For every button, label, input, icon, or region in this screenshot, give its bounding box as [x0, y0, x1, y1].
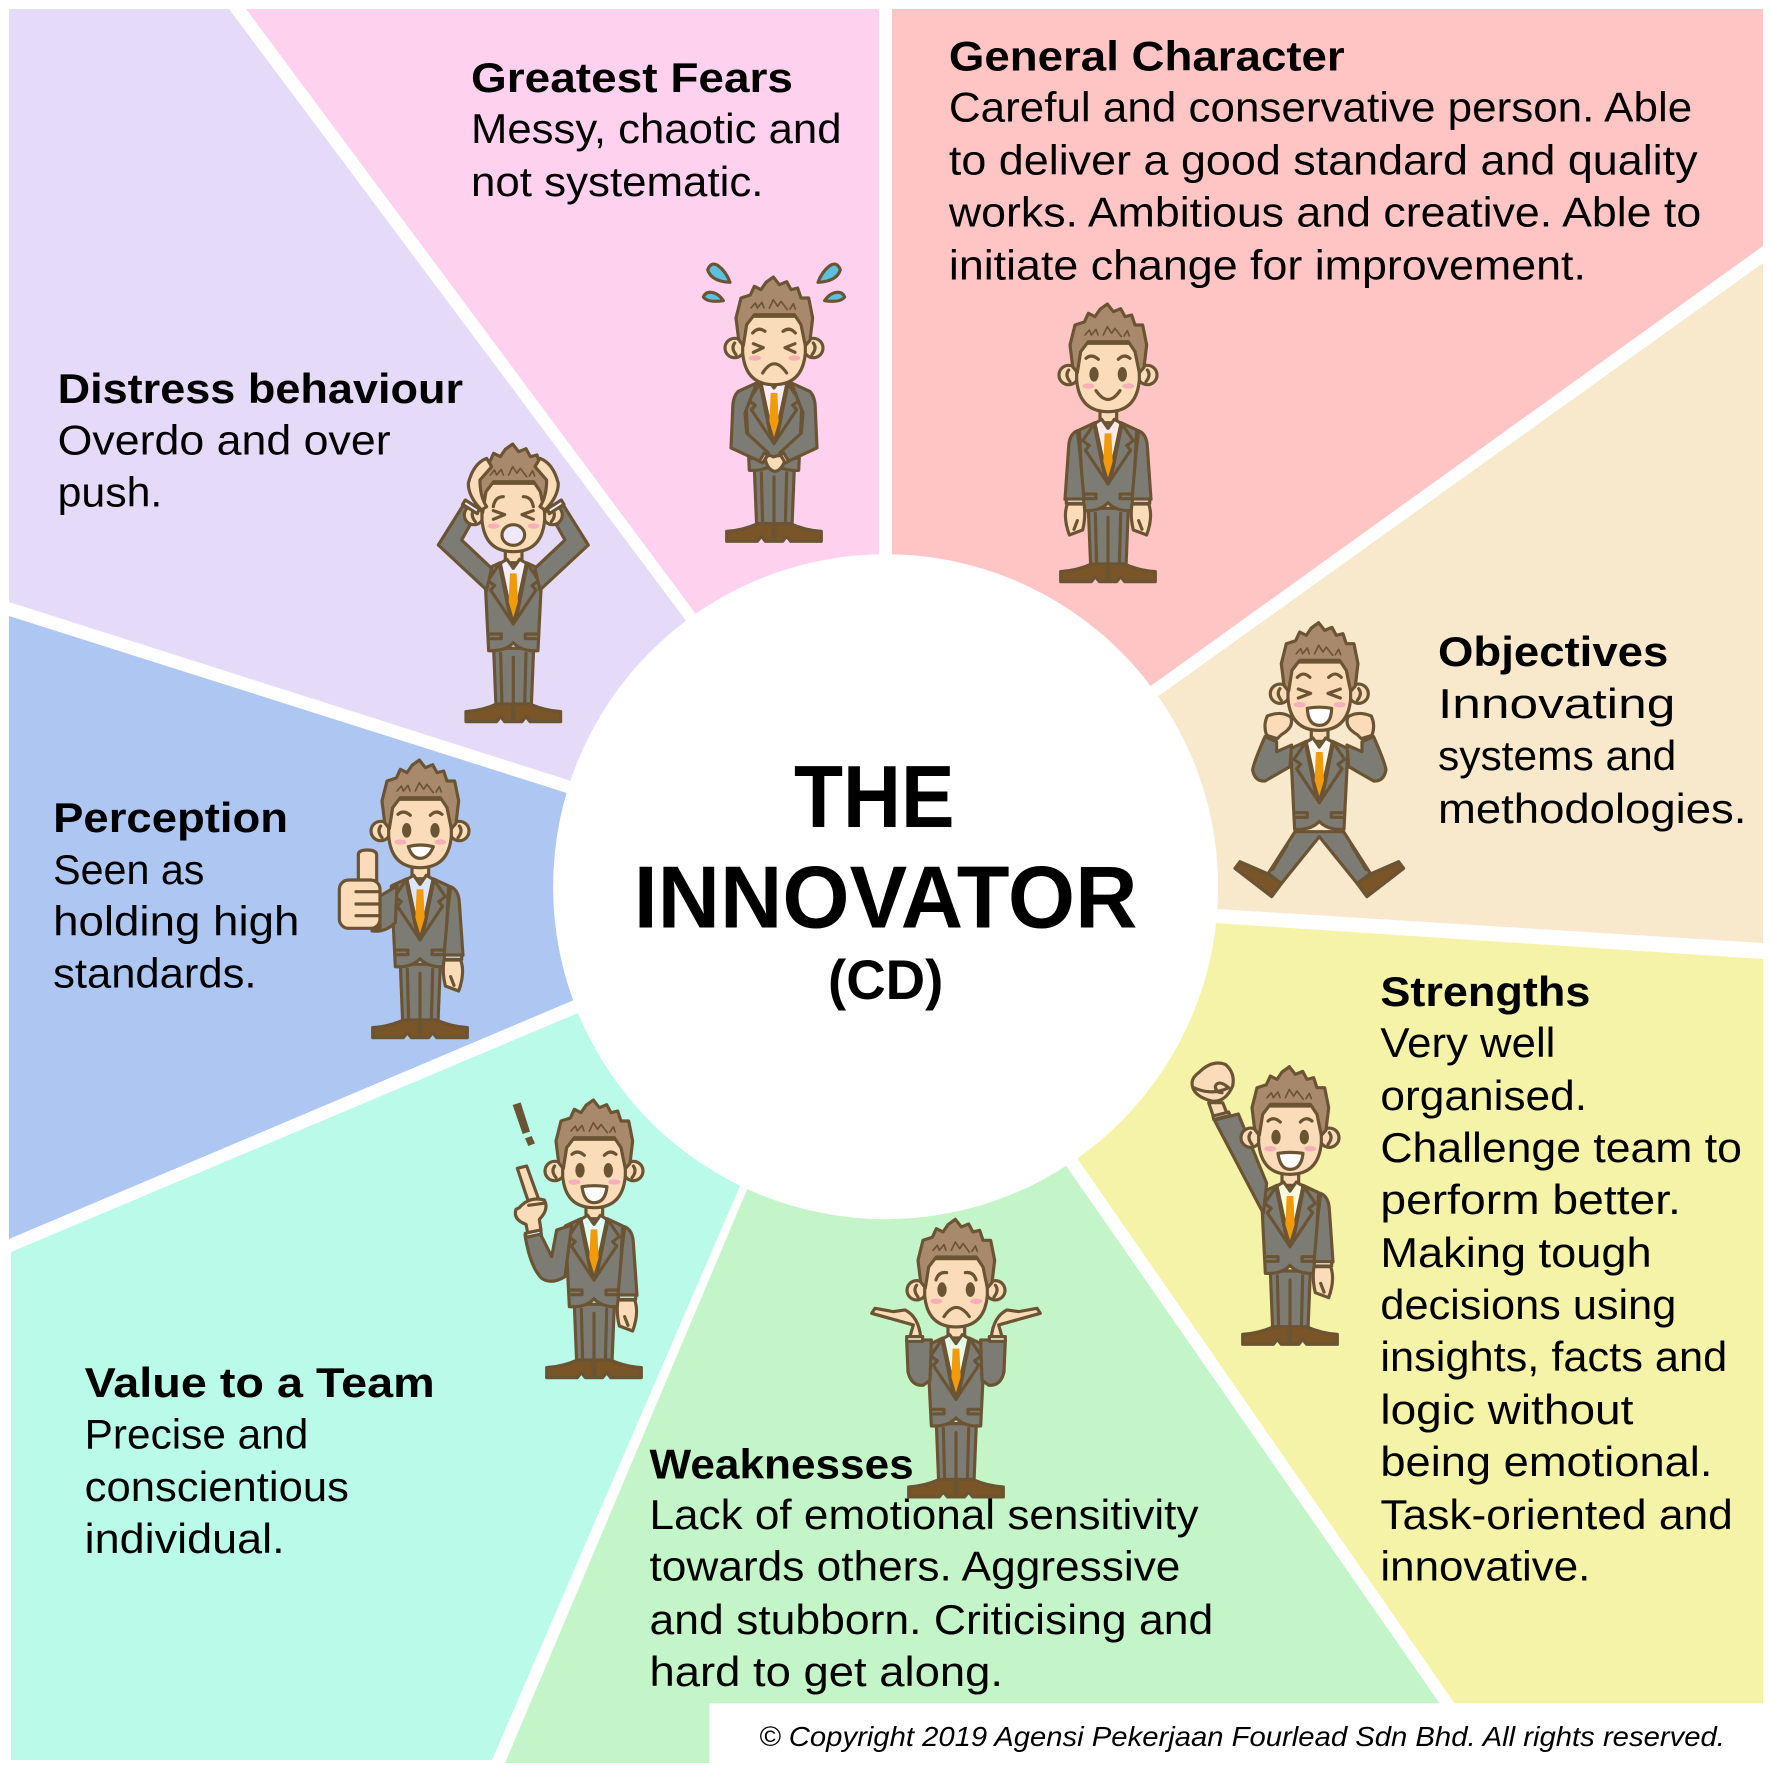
title: the innovator: [634, 747, 1138, 946]
text: weaknesses description: [650, 1491, 1213, 1695]
text: strengths description: being emotional.: [1380, 1438, 1712, 1485]
text: value to a team description: [85, 1411, 349, 1562]
text: weaknesses description: and stubborn. Criticising and: [650, 1596, 1213, 1643]
text: value to a team description: conscientious: [85, 1463, 349, 1510]
text: greatest fears description: [471, 105, 842, 205]
text: general character description: Careful and conservative person. Able: [949, 84, 1692, 130]
icon: businessman thumbs up: [339, 760, 469, 1038]
text: strengths description: Task-oriented and: [1380, 1491, 1733, 1538]
text: strengths description: decisions using: [1380, 1281, 1676, 1328]
heading: value to a team: Value to a Team: [85, 1359, 435, 1406]
text: strengths description: innovative.: [1380, 1543, 1590, 1590]
text: greatest fears description: Messy, chaotic and: [471, 105, 842, 152]
text: general character description: to deliver a good standard and quality: [949, 137, 1698, 184]
text: greatest fears description: not systematic.: [471, 158, 764, 205]
heading: perception: Perception: [53, 794, 288, 841]
heading: objectives: Objectives: [1438, 628, 1668, 675]
text: perception description: standards.: [53, 950, 256, 996]
heading: greatest fears: Greatest Fears: [471, 54, 793, 101]
panel: perception: [9, 616, 886, 1239]
icon: businessman pointing with exclamation mark: [513, 1100, 643, 1378]
heading: general character: General Character: [949, 32, 1345, 79]
heading: distress behaviour: Distress behaviour: [58, 365, 463, 412]
icon: worried businessman with sweat drops: [703, 264, 845, 541]
panel: value to a team: [11, 887, 886, 1760]
text: weaknesses description: towards others. Aggressive: [650, 1543, 1180, 1590]
text: value to a team description: individual.: [85, 1515, 285, 1562]
text: strengths description: [1380, 1019, 1742, 1590]
text: perception description: Seen as: [53, 846, 204, 893]
title: the innovator: INNOVATOR: [634, 847, 1138, 946]
text: weaknesses description: hard to get along.: [650, 1648, 1003, 1695]
text: distress behaviour description: Overdo and over: [58, 417, 391, 464]
text: strengths description: Making tough: [1380, 1229, 1652, 1276]
panel: weaknesses: [505, 887, 1440, 1763]
panel: objectives: [886, 263, 1763, 943]
text: strengths description: perform better.: [1380, 1176, 1681, 1223]
panel: strengths: [886, 887, 1763, 1704]
text: distress behaviour description: [58, 417, 391, 516]
heading: weaknesses: Weaknesses: [650, 1440, 914, 1487]
text: objectives description: [1438, 680, 1746, 832]
text: value to a team description: Precise and: [85, 1411, 308, 1458]
icon: smiling businessman: [1059, 304, 1157, 582]
text: general character description: [948, 84, 1701, 289]
text: general character description: works. Ambitious and creative. Able to: [948, 188, 1701, 236]
copyright bar: [709, 1703, 1772, 1772]
title: the innovator: THE: [794, 747, 954, 846]
text: perception description: [53, 846, 299, 996]
text: strengths description: Very well: [1380, 1019, 1555, 1066]
text: strengths description: organised.: [1380, 1072, 1587, 1119]
text: strengths description: Challenge team to: [1380, 1124, 1742, 1171]
text: general character description: initiate change for improvement.: [949, 242, 1586, 289]
icon: businessman holding his head: [438, 444, 588, 722]
icon: shrugging businessman: [872, 1219, 1040, 1497]
text: objectives description: systems and: [1438, 732, 1676, 779]
copyright text: © Copyright 2019 Agensi Pekerjaan Fourlead Sdn Bhd. All rights reserved.: [759, 1721, 1725, 1752]
heading: strengths: Strengths: [1380, 968, 1590, 1015]
panel: general character: [886, 9, 1763, 887]
icon: businessman raising fist: [1192, 1063, 1339, 1344]
text: perception description: holding high: [53, 898, 299, 945]
text: strengths description: logic without: [1380, 1386, 1634, 1433]
text: objectives description: methodologies.: [1438, 785, 1746, 832]
text: weaknesses description: Lack of emotional sensitivity: [650, 1491, 1198, 1538]
icon: jumping businessman: [1235, 623, 1404, 897]
text: distress behaviour description: push.: [58, 469, 162, 516]
text: strengths description: insights, facts and: [1380, 1333, 1727, 1380]
centre circle with title: [553, 554, 1218, 1219]
panel: distress behaviour: [9, 9, 886, 887]
subtitle: (CD): (CD): [828, 948, 943, 1011]
panel: greatest fears: [246, 9, 886, 887]
text: objectives description: Innovating: [1438, 680, 1675, 727]
